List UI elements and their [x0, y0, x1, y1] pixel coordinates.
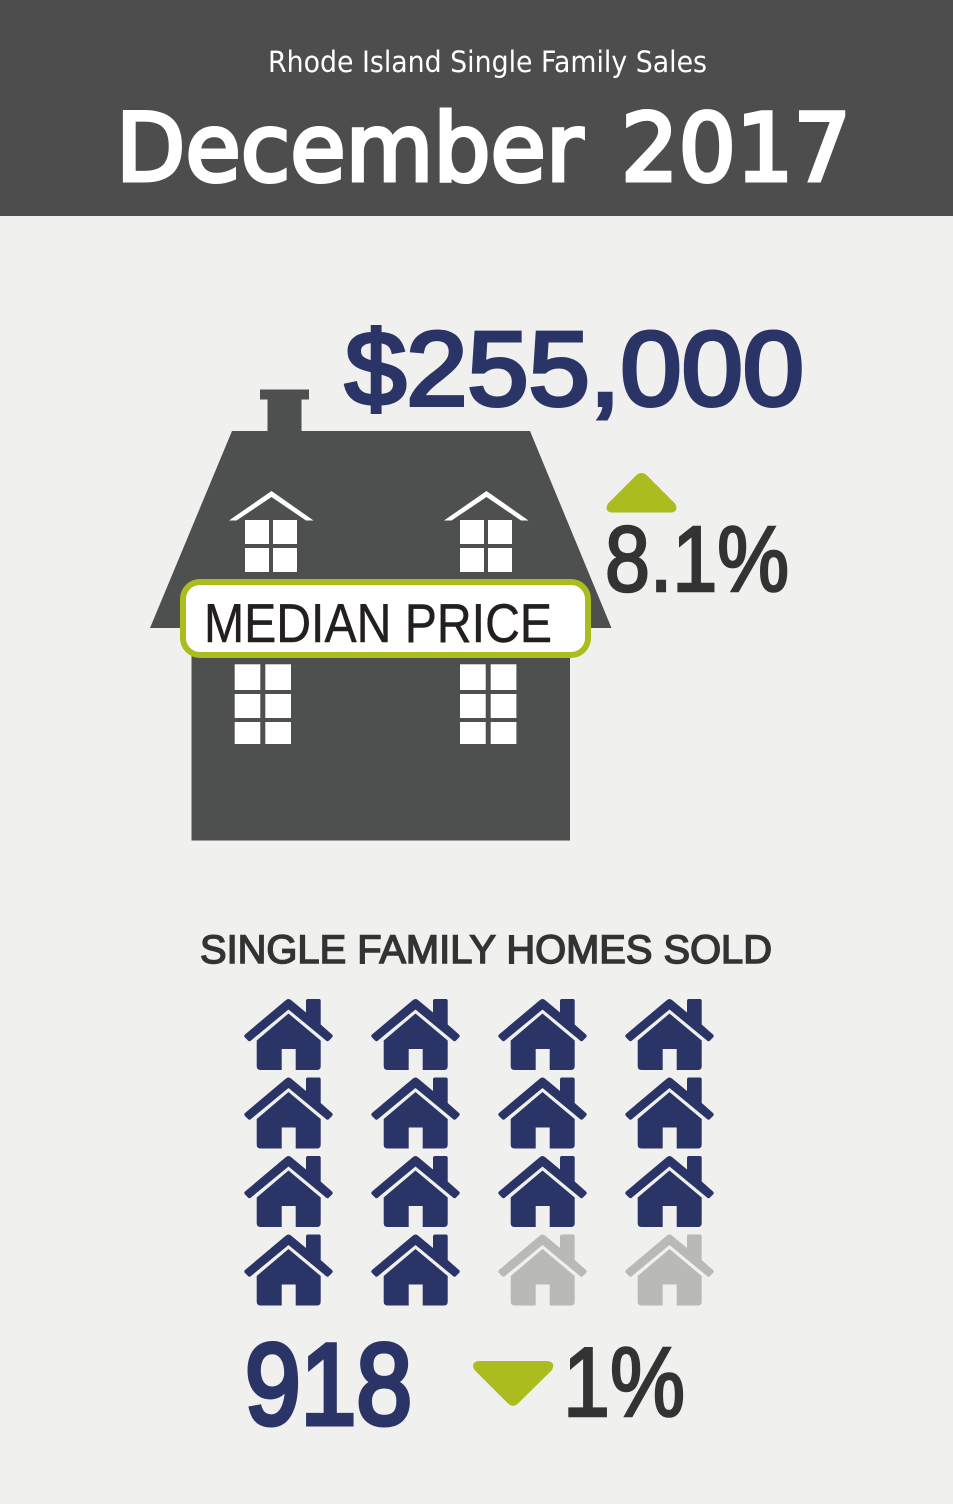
homes sold change: 1% — [563, 1327, 685, 1437]
dormer left — [229, 491, 314, 572]
icon: large house — [150, 390, 612, 840]
median price value: $255,000 — [345, 311, 804, 428]
unfilled homes — [498, 1234, 714, 1306]
pictogram: homes sold — [244, 999, 714, 1306]
roof and body — [150, 431, 612, 840]
header title: December — [116, 94, 583, 204]
dormer right — [444, 491, 528, 572]
header title: 2017 — [621, 94, 851, 204]
header title — [116, 94, 851, 204]
icon: down arrow — [473, 1361, 553, 1406]
header band — [0, 0, 953, 216]
header subtitle: Rhode Island Single Family Sales — [268, 45, 707, 79]
icon: up arrow — [607, 473, 676, 512]
lower window left — [235, 664, 291, 744]
median price change: 8.1% — [605, 507, 789, 611]
homes sold heading: SINGLE FAMILY HOMES SOLD — [200, 928, 772, 972]
median price label: MEDIAN PRICE — [204, 592, 552, 654]
homes sold value: 918 — [245, 1321, 412, 1449]
chimney — [260, 390, 309, 432]
lower window right — [460, 664, 516, 744]
filled homes — [244, 999, 714, 1306]
